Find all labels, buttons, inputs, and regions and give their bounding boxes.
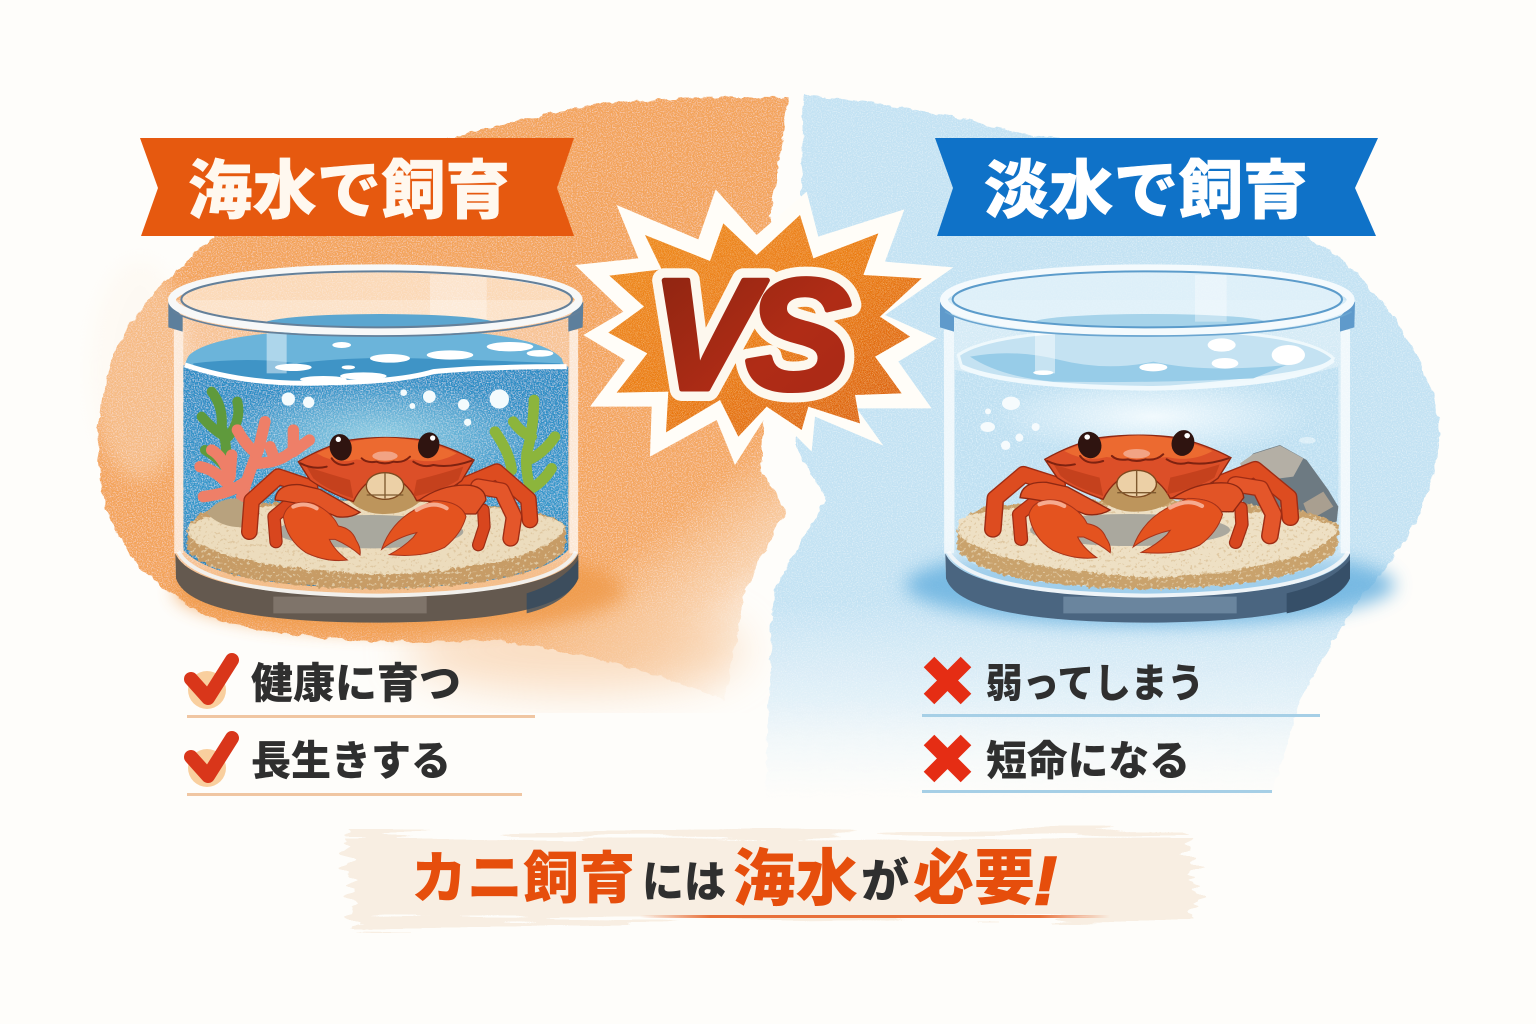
glass highlights: [174, 330, 183, 553]
banner: seawater: [140, 138, 574, 236]
water body: [183, 365, 568, 588]
crab: [993, 428, 1290, 558]
sand: [958, 500, 1339, 589]
rim interior: [952, 271, 1342, 328]
back water surface: [263, 314, 497, 334]
check icon 2: [188, 738, 232, 787]
exclamation: !: [1034, 843, 1057, 919]
freshwater tank: [940, 268, 1355, 623]
rim interior: [182, 271, 572, 328]
base: [945, 553, 1350, 623]
list: seawater benefits: [187, 660, 535, 796]
white burst outline: [575, 189, 953, 465]
drawback text 1: 弱ってしまう: [986, 662, 1204, 706]
coral: [200, 422, 309, 497]
glass highlights: [944, 330, 954, 553]
banner: seawater: 海水で飼育: [188, 155, 510, 227]
conclusion text 1: カニ飼育: [411, 847, 635, 910]
lower glass rim: [948, 552, 1348, 596]
VS burst: [575, 189, 953, 465]
conclusion text 4: が: [861, 855, 909, 907]
seaweed left: [202, 392, 238, 467]
glass body: [943, 300, 1350, 623]
glass body: [173, 300, 578, 623]
check icon 1: [188, 660, 232, 709]
seawater tank: [168, 268, 583, 623]
water surface: [958, 329, 1333, 388]
VS outline lettering: VS: [651, 247, 851, 423]
back water surface: [1033, 314, 1267, 331]
base: [175, 553, 578, 623]
banner: freshwater: [935, 138, 1378, 236]
VS lettering: VS: [651, 247, 851, 423]
conclusion text 3: 海水: [733, 845, 858, 914]
drawback text 2: 短命になる: [986, 738, 1190, 784]
tank ground shadow orange: [175, 548, 625, 632]
tank ground shadow blue: [905, 545, 1395, 625]
cross icon 1: [929, 662, 966, 699]
orange seawater side background: [90, 97, 789, 700]
bubbles: [980, 397, 1316, 450]
conclusion text 5: 必要: [913, 845, 1035, 912]
rim: [168, 302, 183, 332]
crab shadow: [277, 515, 463, 548]
orange burst: [608, 215, 922, 437]
benefit text 1: 健康に育つ: [251, 660, 461, 707]
list: freshwater drawbacks: [922, 662, 1320, 793]
blue freshwater side background: [765, 95, 1440, 800]
surface foam: [1033, 338, 1305, 375]
underline: [640, 915, 1110, 918]
surface foam: [275, 342, 553, 383]
rock: [1228, 445, 1338, 532]
water surface: [185, 328, 567, 384]
cross icon 2: [929, 740, 966, 777]
water body: [955, 367, 1338, 588]
seaweed right: [495, 400, 555, 488]
conclusion strip: [345, 834, 1195, 924]
rim: [940, 302, 954, 332]
benefit text 2: 長生きする: [251, 738, 451, 784]
lower glass rim: [178, 552, 576, 596]
sand: [188, 500, 566, 589]
conclusion text 2: には: [642, 858, 726, 907]
crab shadow: [1030, 514, 1230, 546]
brush background: [345, 834, 1195, 924]
banner: freshwater: 淡水で飼育: [984, 155, 1308, 227]
bubbles: [282, 389, 509, 426]
crab: [249, 430, 530, 561]
